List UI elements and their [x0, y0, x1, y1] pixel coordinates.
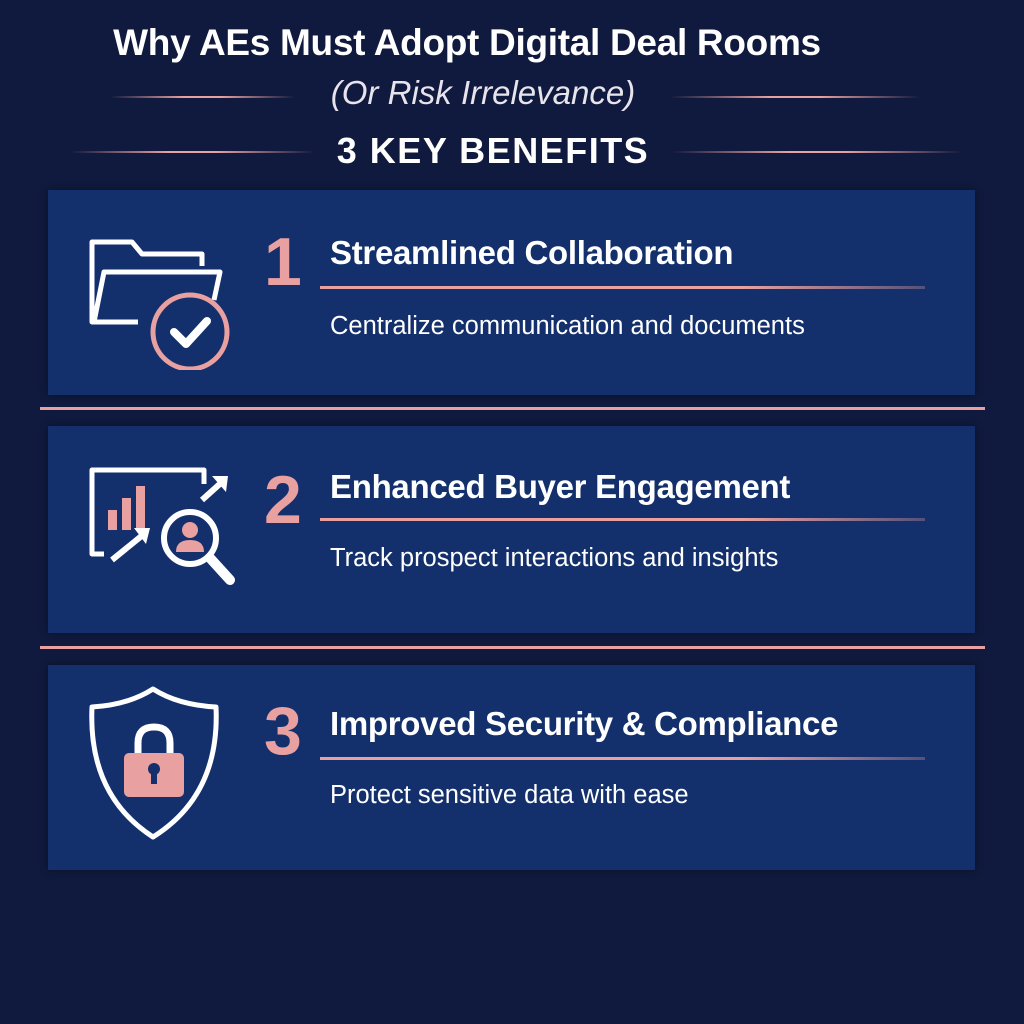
subtitle: (Or Risk Irrelevance) — [331, 74, 635, 111]
heading: 3 key benefits: 3 KEY BENEFITS — [337, 130, 649, 171]
title: Why AEs Must Adopt Digital Deal Rooms — [113, 22, 821, 63]
heading: Enhanced Buyer Engagement — [330, 468, 790, 505]
panel: streamlined collaboration — [48, 190, 975, 395]
heading: Streamlined Collaboration — [330, 234, 733, 271]
number 2: 2 — [264, 462, 302, 538]
description: Protect sensitive data with ease — [330, 781, 689, 809]
description: Track prospect interactions and insights — [330, 544, 778, 572]
icon: folder with check — [90, 240, 230, 370]
heading: Improved Security & Compliance — [330, 705, 838, 742]
description: Centralize communication and documents — [330, 312, 805, 340]
icon: analytics magnifier — [90, 468, 235, 585]
panel: improved security — [48, 665, 975, 870]
number 1: 1 — [264, 224, 302, 300]
icon: shield with lock — [89, 686, 219, 840]
number 3: 3 — [264, 693, 302, 769]
panel: enhanced buyer engagement — [48, 426, 975, 633]
